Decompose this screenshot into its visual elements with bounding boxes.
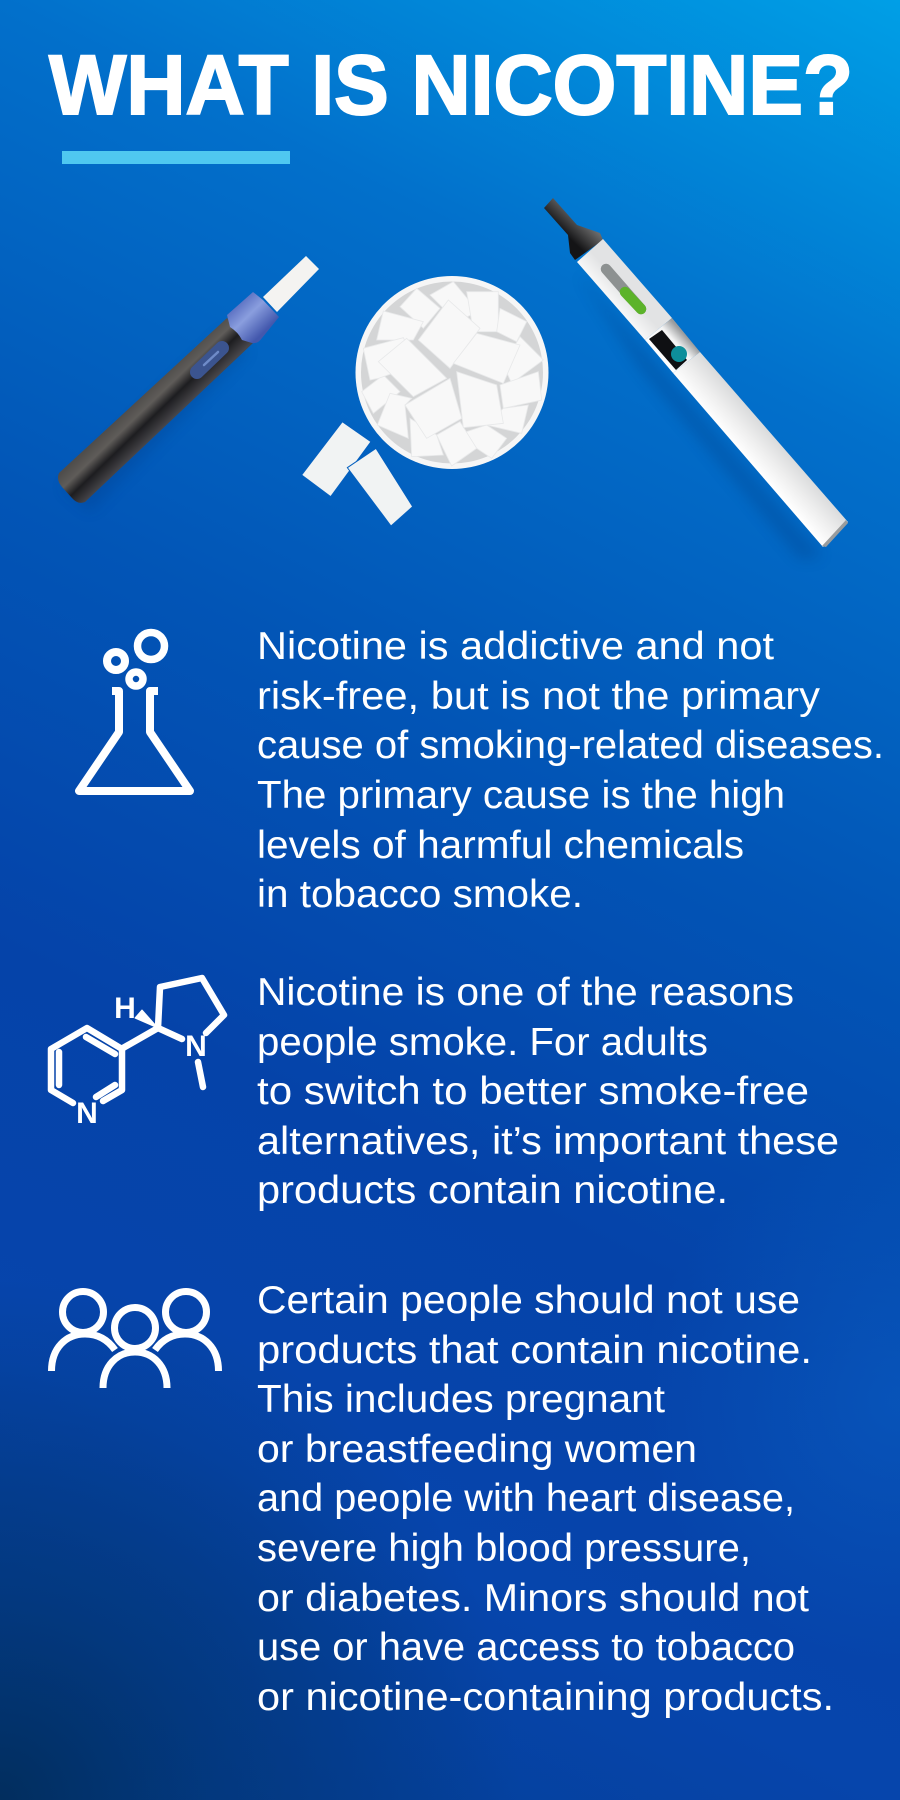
panel: who should not use <box>52 1279 834 1719</box>
text block: This includes pregnant <box>257 1378 665 1421</box>
text block: people smoke. For adults <box>257 1021 708 1064</box>
text block: products that contain nicotine. <box>257 1329 812 1372</box>
heated tobacco device <box>58 256 319 512</box>
text block: or nicotine-containing products. <box>257 1676 834 1719</box>
panel: nicotine is addictive <box>79 625 884 916</box>
text block: or diabetes. Minors should not <box>257 1577 809 1620</box>
text block: risk-free, but is not the primary <box>257 675 821 718</box>
icon: nicotine molecule: N <box>185 1030 207 1063</box>
text block: Certain people should not use <box>257 1279 800 1322</box>
text block: use or have access to tobacco <box>257 1626 795 1669</box>
text block: in tobacco smoke. <box>257 873 583 916</box>
title underline bar <box>62 151 290 164</box>
snus bowl with pouches <box>302 276 548 526</box>
text block: The primary cause is the high <box>257 774 785 817</box>
panel: reasons people smoke <box>51 971 839 1212</box>
text block: products contain nicotine. <box>257 1169 728 1212</box>
text block: severe high blood pressure, <box>257 1527 751 1570</box>
loose pouches <box>302 422 413 526</box>
text block <box>257 625 884 916</box>
text block: or breastfeeding women <box>257 1428 697 1471</box>
icon: flask with bubbles <box>79 632 190 791</box>
icon: nicotine molecule: N <box>76 1097 98 1130</box>
icon: nicotine molecule <box>51 978 224 1130</box>
vape pen <box>544 198 848 560</box>
icon: nicotine molecule: H <box>114 992 136 1025</box>
product illustration <box>58 198 848 560</box>
title: WHAT IS NICOTINE? <box>49 38 853 132</box>
text block: alternatives, it’s important these <box>257 1120 839 1163</box>
text block: cause of smoking-related diseases. <box>257 724 884 767</box>
text block: to switch to better smoke-free <box>257 1070 809 1113</box>
text block: Nicotine is one of the reasons <box>257 971 794 1014</box>
icon: group of people <box>52 1292 218 1388</box>
text block: levels of harmful chemicals <box>257 824 744 867</box>
text block <box>257 1279 834 1719</box>
text block: Nicotine is addictive and not <box>257 625 774 668</box>
text block <box>257 971 839 1212</box>
text block: and people with heart disease, <box>257 1477 795 1520</box>
